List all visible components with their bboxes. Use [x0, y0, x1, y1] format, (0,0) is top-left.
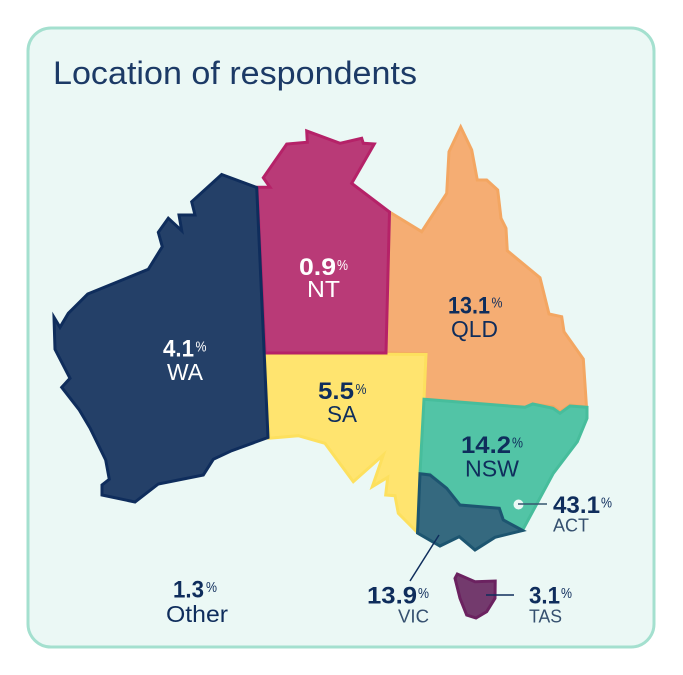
- label: Other: 1.3: [173, 576, 204, 604]
- label: NT: %: [337, 257, 348, 274]
- label: Other: Other: [166, 601, 228, 627]
- label: ACT: ACT: [553, 514, 589, 536]
- map: Australia by state: [54, 127, 587, 618]
- label: VIC: [367, 582, 429, 626]
- label: TAS: 3.1: [529, 582, 560, 610]
- label: NT: 0.9: [299, 254, 336, 281]
- label: WA: [163, 336, 206, 385]
- label: SA: %: [356, 381, 366, 398]
- title: Location of respondents: [53, 55, 417, 91]
- label: QLD: %: [492, 294, 502, 312]
- label: SA: [318, 378, 366, 427]
- leader line: VIC: [410, 535, 439, 581]
- label: NSW: 14.2: [461, 432, 511, 459]
- label: NSW: [461, 432, 523, 482]
- label: VIC: %: [418, 585, 429, 602]
- state: WA: [54, 174, 268, 502]
- label: NT: NT: [307, 276, 340, 302]
- state: VIC: [418, 474, 523, 550]
- marker: ACT: [514, 500, 547, 510]
- label: TAS: %: [561, 585, 572, 602]
- state: QLD: [386, 127, 586, 412]
- label: ACT: %: [601, 494, 612, 512]
- label: Other: %: [206, 579, 217, 596]
- label: NT: [299, 254, 348, 302]
- label: TAS: [529, 582, 572, 626]
- state: SA: [265, 354, 426, 532]
- label: QLD: QLD: [451, 316, 498, 342]
- leader line: TAS: [486, 594, 514, 596]
- label: QLD: 13.1: [448, 292, 490, 320]
- label: ACT: 43.1: [553, 492, 600, 519]
- label: SA: SA: [327, 401, 357, 427]
- label: WA: 4.1: [163, 336, 194, 362]
- label: Other: [166, 576, 228, 627]
- label: VIC: 13.9: [367, 582, 417, 610]
- label: WA: %: [196, 338, 206, 356]
- label: VIC: VIC: [398, 606, 429, 626]
- state: TAS: [455, 574, 495, 618]
- label: NSW: NSW: [465, 456, 520, 482]
- state: NT: [257, 131, 390, 353]
- label: SA: 5.5: [318, 378, 354, 405]
- label: WA: WA: [167, 359, 203, 385]
- label: TAS: TAS: [529, 606, 562, 626]
- label: ACT: [553, 492, 612, 536]
- label: NSW: %: [512, 434, 523, 452]
- state: NSW: [420, 399, 587, 530]
- label: QLD: [448, 292, 502, 342]
